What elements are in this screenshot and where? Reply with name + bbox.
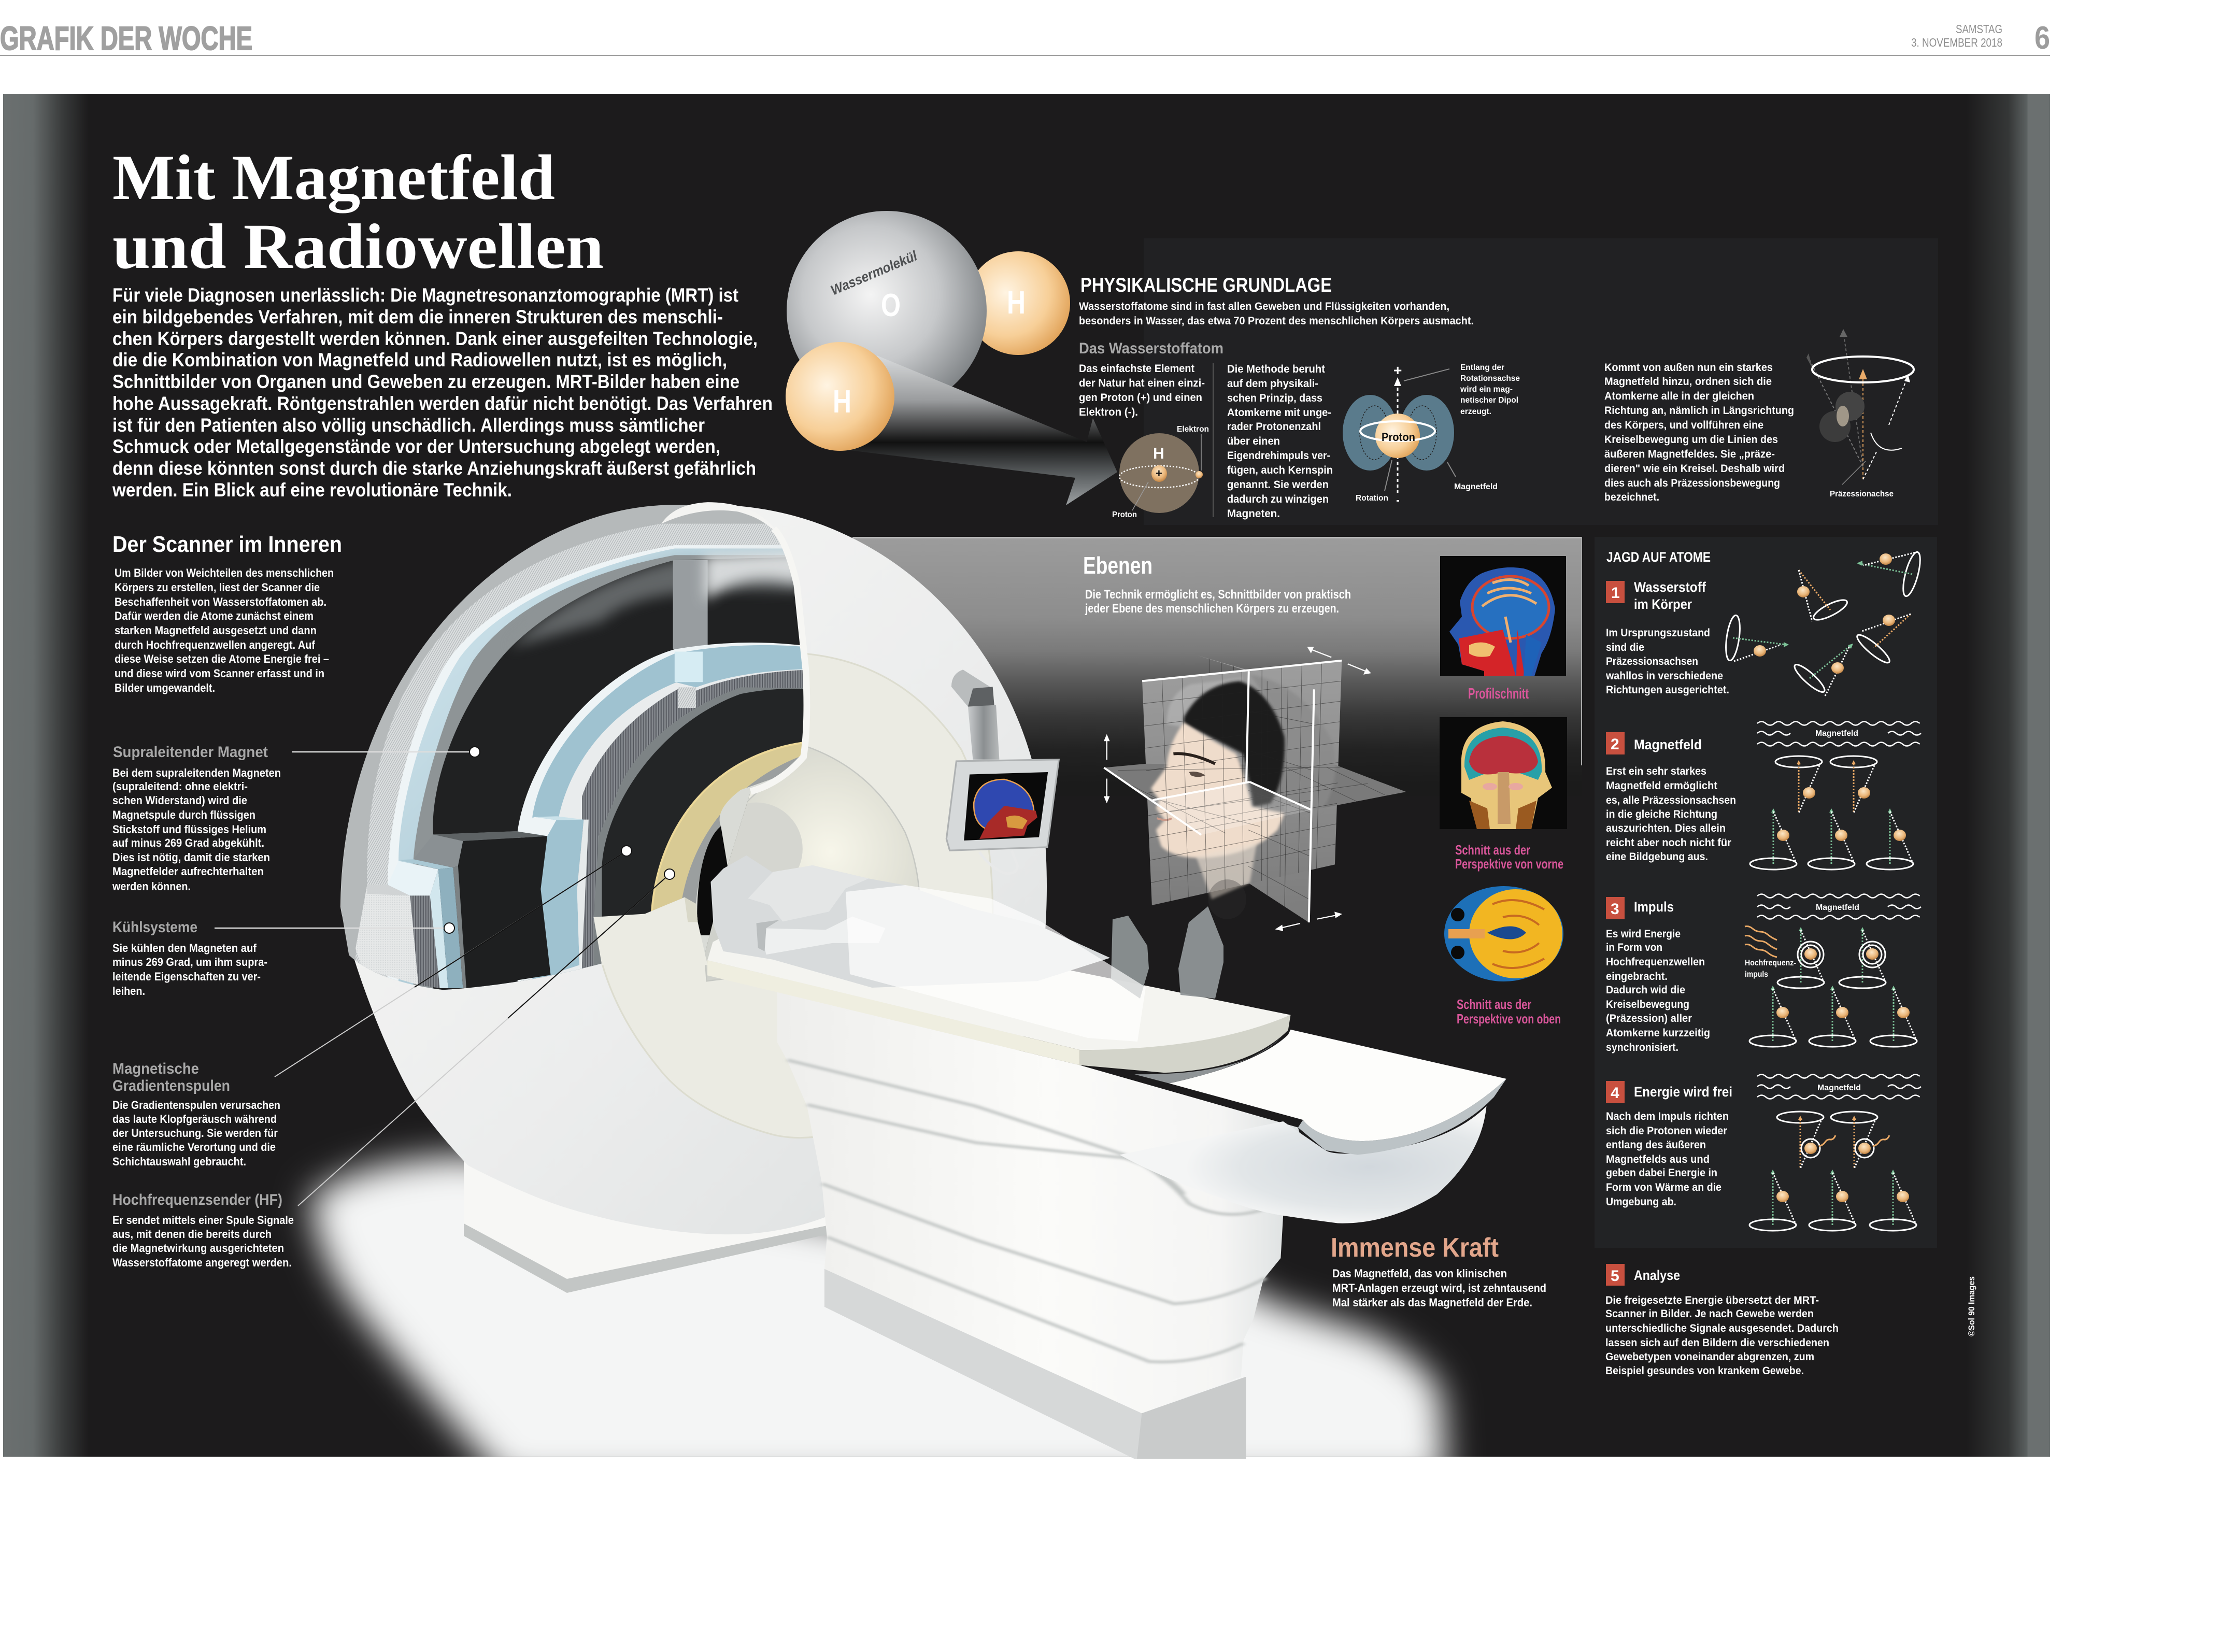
label: Supraleitender Magnet: Dies ist nötig, damit die starken bbox=[112, 851, 270, 864]
step 4: entlang des äußeren bbox=[1606, 1139, 1706, 1151]
step 1: Wasserstoff bbox=[1634, 579, 1706, 595]
column: precession text: des Körpers, und vollführen eine bbox=[1604, 419, 1763, 431]
label: Magnetische Gradientenspulen bbox=[112, 1060, 280, 1168]
column: precession text bbox=[1604, 362, 1794, 503]
step 2: reicht aber noch nicht für bbox=[1606, 837, 1731, 849]
bed slab bbox=[707, 922, 1290, 1084]
step 3: synchronisiert. bbox=[1606, 1042, 1678, 1053]
caption: Schnitt von vorne bbox=[1455, 842, 1563, 872]
column: hydrogen element: Das einfachste Element bbox=[1079, 363, 1194, 375]
step 2: Magnetfeld bbox=[1634, 737, 1702, 752]
hair bbox=[1184, 681, 1285, 807]
scanner intro text: starken Magnetfeld ausgesetzt und dann bbox=[115, 624, 317, 637]
table band shadows bbox=[787, 1060, 1266, 1362]
column: method: Magneten. bbox=[1227, 508, 1280, 520]
step 3 bbox=[1606, 897, 1710, 1053]
label: Magnetische Gradientenspulen: Schichtauswahl gebraucht. bbox=[112, 1155, 246, 1168]
horizontal plane near quadrant bbox=[1152, 782, 1312, 835]
step 4: Energie wird frei bbox=[1634, 1084, 1732, 1100]
patient body bbox=[710, 856, 1110, 988]
label: Magnetische Gradientenspulen: eine räumliche Verortung und die bbox=[112, 1141, 276, 1153]
intro text: ein bildgebendes Verfahren, mit dem die inneren Strukturen des menschli- bbox=[112, 306, 723, 327]
table body bbox=[777, 992, 1318, 1413]
step 3: (Präzession) aller bbox=[1606, 1013, 1692, 1024]
label: Kühlsysteme bbox=[112, 919, 267, 998]
icon: precession: Präzessionachse bbox=[1830, 490, 1894, 499]
step 2: 2 bbox=[1611, 736, 1619, 753]
step 5: unterschiedliche Signale ausgesendet. Dadurch bbox=[1605, 1322, 1839, 1334]
column: method: schen Prinzip, dass bbox=[1227, 392, 1322, 404]
facial details bbox=[1157, 753, 1215, 820]
magnifying cone arrow bbox=[850, 355, 1117, 505]
oxygen sphere bbox=[787, 211, 987, 411]
table bbox=[707, 922, 1506, 1459]
label: Supraleitender Magnet: Supraleitender Magnet bbox=[113, 744, 268, 761]
step 5: Analyse bbox=[1634, 1268, 1680, 1283]
icon: proton with magnetic field: + bbox=[1393, 362, 1402, 378]
step 2: auszurichten. Dies allein bbox=[1606, 822, 1726, 834]
caption: Schnitt von oben: Perspektive von oben bbox=[1457, 1011, 1561, 1027]
icon: hydrogen atom: Proton bbox=[1112, 510, 1137, 519]
intro text: Schnittbilder von Organen und Geweben zu erzeugen. MRT-Bilder haben eine bbox=[112, 371, 739, 392]
callout: Immense Kraft: Das Magnetfeld, das von klinischen bbox=[1332, 1267, 1507, 1280]
label: Supraleitender Magnet: Magnetspule durch flüssigen bbox=[112, 808, 255, 821]
column: precession text: Atomkerne alle in der gleichen bbox=[1604, 390, 1754, 402]
hair back bbox=[1250, 675, 1335, 818]
scanner intro text bbox=[115, 566, 334, 694]
right hydrogen bbox=[966, 251, 1070, 355]
scanner stand bbox=[464, 1156, 828, 1293]
column: method: Die Methode beruht bbox=[1227, 363, 1325, 375]
step 5 bbox=[1605, 1264, 1839, 1377]
scanner intro text: diese Weise setzen die Atome Energie frei – bbox=[115, 652, 329, 665]
caption: Schnitt von oben: Schnitt aus der bbox=[1457, 996, 1531, 1012]
step 5: 5 bbox=[1611, 1268, 1619, 1285]
floor glow bbox=[311, 1156, 1446, 1482]
step 1: wahllos in verschiedene bbox=[1605, 670, 1723, 682]
icon: proton with magnetic field: Proton bbox=[1382, 431, 1415, 444]
step 5: Die freigesetzte Energie übersetzt der MRT- bbox=[1605, 1294, 1819, 1306]
intro text bbox=[112, 284, 773, 501]
coronal plane bbox=[1142, 661, 1342, 905]
scanner intro text: Bilder umgewandelt. bbox=[115, 681, 215, 694]
column: precession text: Kreiselbewegung um die Linien des bbox=[1604, 434, 1778, 446]
column: precession text: Richtung an, nämlich in Längsrichtung bbox=[1604, 405, 1794, 417]
column: hydrogen element bbox=[1079, 363, 1205, 418]
step 4: Magnetfelds aus und bbox=[1606, 1153, 1710, 1165]
intro text: Schmuck oder Metallgegenstände vor der Untersuchung abgelegt werden, bbox=[112, 436, 720, 457]
column: precession text: äußeren Magnetfeldes. Sie „präze- bbox=[1604, 448, 1775, 460]
intro text: Für viele Diagnosen unerlässlich: Die Magnetresonanztomographie (MRT) ist bbox=[112, 284, 738, 306]
image: sagittal brain scan bbox=[1440, 556, 1566, 676]
label: Hochfrequenzsender: aus, mit denen die bereits durch bbox=[112, 1228, 272, 1241]
step 5: Gewebetypen voneinander abgrenzen, zum bbox=[1605, 1351, 1814, 1363]
column: precession text: Magnetfeld hinzu, ordnen sich die bbox=[1604, 376, 1772, 388]
label: Hochfrequenzsender: Hochfrequenzsender (HF) bbox=[112, 1191, 282, 1208]
intro text: werden. Ein Blick auf eine revolutionäre Technik. bbox=[112, 479, 512, 501]
date bbox=[1911, 22, 2002, 49]
icon: proton with magnetic field: Magnetfeld bbox=[1454, 482, 1498, 491]
scanner intro text: Dafür werden die Atome zunächst einem bbox=[115, 609, 314, 622]
physikalische Grundlage text: Das Wasserstoffatom bbox=[1079, 340, 1223, 357]
Ebenen heading and text: Ebenen bbox=[1083, 552, 1152, 579]
step 4 bbox=[1606, 1081, 1732, 1208]
step 5: Beispiel gesundes von krankem Gewebe. bbox=[1605, 1365, 1804, 1377]
column: method: genannt. Sie werden bbox=[1227, 479, 1329, 491]
diagram: random precession axes bbox=[1724, 550, 1924, 696]
leader lines and dots bbox=[215, 747, 675, 1206]
step 5: lassen sich auf den Bildern die verschiedenen bbox=[1605, 1337, 1829, 1349]
diagram: impulse: impuls bbox=[1745, 970, 1768, 979]
column: method: dadurch zu winzigen bbox=[1227, 493, 1329, 505]
tray front bbox=[1119, 1106, 1487, 1223]
tray top bbox=[1169, 1030, 1506, 1141]
tray rim bbox=[1298, 1079, 1506, 1155]
icon: proton with magnetic field: netischer Dipol bbox=[1460, 396, 1518, 405]
left hydrogen bbox=[786, 342, 894, 451]
diagram: aligned axes bbox=[1750, 721, 1921, 870]
column: method: rader Protonenzahl bbox=[1227, 421, 1321, 433]
column: precession text: dies auch als Präzessionsbewegung bbox=[1604, 477, 1780, 489]
diagram: energy release: Magnetfeld bbox=[1817, 1084, 1861, 1092]
caption: Schnitt von vorne: Schnitt aus der bbox=[1455, 842, 1530, 858]
column: method: fügen, auch Kernspin bbox=[1227, 464, 1333, 476]
intro text: ist für den Patienten also völlig unschädlich. Allerdings muss sämtlicher bbox=[112, 415, 705, 436]
cutaway section bbox=[331, 499, 820, 1002]
step 3: 3 bbox=[1611, 901, 1619, 918]
scanner intro text: Um Bilder von Weichteilen des menschlichen bbox=[115, 566, 334, 579]
icon: proton with magnetic field: erzeugt. bbox=[1460, 407, 1491, 416]
label: Kühlsysteme: leitende Eigenschaften zu ver- bbox=[112, 970, 261, 983]
step 2: eine Bildgebung aus. bbox=[1606, 851, 1708, 863]
callout: Immense Kraft bbox=[1331, 1233, 1546, 1309]
step 4: Nach dem Impuls richten bbox=[1606, 1110, 1729, 1122]
callout: Immense Kraft: Mal stärker als das Magnetfeld der Erde. bbox=[1332, 1296, 1532, 1309]
Jagd auf Atome heading: JAGD AUF ATOME bbox=[1606, 549, 1711, 565]
page header bbox=[0, 20, 2050, 57]
column: precession text: bezeichnet. bbox=[1604, 491, 1659, 503]
step 3: in Form von bbox=[1606, 942, 1662, 953]
shell right edge bbox=[751, 529, 807, 791]
intro text: die die Kombination von Magnetfeld und Radiowellen nutzt, ist es möglich, bbox=[112, 349, 727, 371]
label: Supraleitender Magnet: werden können. bbox=[112, 880, 191, 893]
caption: Profilschnitt: Profilschnitt bbox=[1468, 686, 1529, 702]
diagram: aligned axes: Magnetfeld bbox=[1815, 729, 1858, 738]
step 2: es, alle Präzessionsachsen bbox=[1606, 794, 1736, 806]
label: Supraleitender Magnet bbox=[112, 744, 281, 893]
step 3: Kreiselbewegung bbox=[1606, 999, 1689, 1010]
section title: GRAFIK DER WOCHE bbox=[0, 20, 252, 57]
column: method: über einen bbox=[1227, 435, 1280, 447]
monitor arm bbox=[951, 670, 999, 760]
image: axial brain scan bbox=[1444, 886, 1563, 981]
step 3: Hochfrequenzwellen bbox=[1606, 956, 1705, 968]
Ebenen heading and text: jeder Ebene des menschlichen Körpers zu erzeugen. bbox=[1085, 602, 1339, 616]
step 2: Magnetfeld ermöglicht bbox=[1606, 780, 1717, 792]
horizontal plane bbox=[1104, 764, 1406, 835]
shell top crescent bbox=[661, 502, 787, 548]
Ebenen heading and text: Die Technik ermöglicht es, Schnittbilder von praktisch bbox=[1085, 588, 1351, 602]
label: Hochfrequenzsender: die Magnetwirkung ausgerichteten bbox=[112, 1242, 284, 1255]
column: method: Atomkerne mit unge- bbox=[1227, 407, 1331, 419]
label: Kühlsysteme: Sie kühlen den Magneten auf bbox=[112, 942, 257, 955]
plane arrows bbox=[1105, 647, 1370, 930]
step 1: im Körper bbox=[1634, 596, 1692, 612]
bright plane edges bbox=[1104, 661, 1342, 922]
label: Magnetische Gradientenspulen: das laute Klopfgeräusch während bbox=[112, 1113, 277, 1126]
physikalische Grundlage text bbox=[1079, 274, 1474, 357]
column: method: auf dem physikali- bbox=[1227, 378, 1318, 390]
image: coronal brain scan bbox=[1440, 717, 1567, 829]
atom letters bbox=[833, 285, 1026, 420]
step 1: Richtungen ausgerichtet. bbox=[1606, 684, 1729, 696]
panel: physikalische Grundlage background bbox=[1144, 238, 1938, 525]
scanner intro text: Körpers zu erstellen, liest der Scanner die bbox=[115, 581, 320, 594]
label: Supraleitender Magnet: (supraleitend: ohne elektri- bbox=[112, 780, 248, 793]
date: 3. NOVEMBER 2018 bbox=[1911, 36, 2002, 49]
column: method bbox=[1227, 363, 1333, 520]
physikalische Grundlage text: PHYSIKALISCHE GRUNDLAGE bbox=[1080, 274, 1332, 296]
page number: 6 bbox=[2034, 20, 2050, 56]
column: method: Eigendrehimpuls ver- bbox=[1227, 450, 1330, 462]
step 1 bbox=[1605, 579, 1729, 696]
icon: proton with magnetic field: Rotationsachse bbox=[1460, 374, 1520, 383]
intro text: hohe Aussagekraft. Röntgenstrahlen werden dafür nicht benötigt. Das Verfahren bbox=[112, 393, 773, 414]
panel: Ebenen background bbox=[852, 537, 1582, 796]
illustration: head with cutting planes bbox=[1104, 647, 1406, 930]
icon: hydrogen atom bbox=[1112, 425, 1209, 519]
step 4: geben dabei Energie in bbox=[1606, 1167, 1717, 1179]
icon: proton with magnetic field: wird ein mag- bbox=[1460, 385, 1513, 394]
callout: Immense Kraft: MRT-Anlagen erzeugt wird, ist zehntausend bbox=[1332, 1281, 1546, 1294]
step 4: 4 bbox=[1611, 1085, 1619, 1102]
scanner intro text: Beschaffenheit von Wasserstoffatomen ab. bbox=[115, 595, 326, 608]
step 3: Impuls bbox=[1634, 899, 1674, 915]
label: Hochfrequenzsender bbox=[112, 1191, 294, 1269]
scanner intro text: und diese wird vom Scanner erfasst und in bbox=[115, 667, 324, 680]
monitor and arm bbox=[946, 670, 1059, 874]
step 2: in die gleiche Richtung bbox=[1606, 808, 1717, 820]
caption: Schnitt von oben bbox=[1457, 996, 1561, 1027]
date: SAMSTAG bbox=[1956, 22, 2002, 36]
icon: proton with magnetic field bbox=[1343, 362, 1520, 503]
title bbox=[112, 142, 604, 282]
step 3: Dadurch wid die bbox=[1606, 984, 1685, 996]
column: hydrogen element: Elektron (-). bbox=[1079, 406, 1138, 418]
step 5: Scanner in Bilder. Je nach Gewebe werden bbox=[1605, 1308, 1814, 1320]
bore lip bbox=[593, 898, 708, 965]
step 3: eingebracht. bbox=[1606, 971, 1668, 982]
water molecule illustration bbox=[786, 211, 1117, 505]
step 4: Umgebung ab. bbox=[1606, 1196, 1676, 1208]
callout: Immense Kraft: Immense Kraft bbox=[1331, 1233, 1499, 1263]
column: hydrogen element: der Natur hat einen einzi- bbox=[1079, 377, 1205, 389]
molecule label: Wassermolekül bbox=[829, 248, 920, 298]
table base bbox=[824, 1269, 1246, 1459]
label: Hochfrequenzsender: Wasserstoffatome angeregt werden. bbox=[112, 1256, 292, 1269]
diagram: impulse: Hochfrequenz- bbox=[1745, 959, 1796, 967]
step 3: Atomkerne kurzzeitig bbox=[1606, 1027, 1710, 1039]
patient feet bbox=[1111, 906, 1223, 999]
title: Mit Magnetfeld bbox=[112, 142, 555, 213]
Ebenen heading and text bbox=[1083, 552, 1351, 616]
column: hydrogen element: gen Proton (+) und einen bbox=[1079, 392, 1202, 404]
label: Supraleitender Magnet: auf minus 269 Grad abgekühlt. bbox=[112, 836, 264, 849]
step 1: Im Ursprungszustand bbox=[1606, 627, 1710, 639]
step 1: Präzessionsachsen bbox=[1606, 656, 1698, 667]
scanner heading: Der Scanner im Inneren bbox=[112, 532, 342, 557]
step 1: sind die bbox=[1606, 642, 1644, 653]
icon: precession bbox=[1806, 329, 1914, 499]
label: Kühlsysteme: minus 269 Grad, um ihm supra- bbox=[112, 956, 267, 969]
label: Kühlsysteme: Kühlsysteme bbox=[112, 919, 197, 936]
bore opening bbox=[593, 654, 993, 1138]
icon: hydrogen atom: H bbox=[1153, 445, 1164, 462]
gantry outer shell bbox=[340, 505, 1047, 1234]
icon: proton with magnetic field: Rotation bbox=[1356, 494, 1388, 503]
label: Supraleitender Magnet: Stickstoff und flüssiges Helium bbox=[112, 823, 266, 836]
neck bbox=[1196, 843, 1257, 899]
intro text: denn diese könnten sonst durch die starke Anziehungskraft äußerst gefährlich bbox=[112, 458, 756, 479]
label: Magnetische Gradientenspulen: Die Gradientenspulen verursachen bbox=[112, 1099, 280, 1112]
label: Magnetische Gradientenspulen: Gradientenspulen bbox=[112, 1077, 230, 1094]
title: und Radiowellen bbox=[112, 211, 604, 282]
step 4: Form von Wärme an die bbox=[1606, 1181, 1721, 1193]
label: Magnetische Gradientenspulen: Magnetische bbox=[112, 1060, 199, 1077]
sagittal plane bbox=[1197, 656, 1314, 922]
diagram: impulse: Magnetfeld bbox=[1816, 903, 1859, 912]
main dark panel bbox=[3, 94, 2050, 1457]
label: Hochfrequenzsender: Er sendet mittels einer Spule Signale bbox=[112, 1214, 294, 1227]
patient sheet bbox=[846, 885, 1146, 1042]
atom letters: H bbox=[1007, 285, 1026, 321]
step 4: sich die Protonen wieder bbox=[1606, 1125, 1727, 1137]
translucent hair front bbox=[1166, 678, 1243, 728]
diagram: energy release bbox=[1749, 1075, 1921, 1231]
step 3: Es wird Energie bbox=[1606, 928, 1681, 940]
label: Supraleitender Magnet: schen Widerstand) wird die bbox=[112, 794, 247, 807]
label: Supraleitender Magnet: Magnetfelder aufrechterhalten bbox=[112, 865, 264, 878]
monitor bbox=[946, 760, 1059, 874]
panel: Jagd auf Atome background bbox=[1595, 537, 1937, 1248]
credit: ©Sol 90 Images bbox=[1967, 1276, 1976, 1336]
step 1: 1 bbox=[1611, 585, 1620, 602]
scanner intro text: durch Hochfrequenzwellen angeregt. Auf bbox=[115, 638, 316, 651]
icon: proton with magnetic field: Entlang der bbox=[1460, 363, 1504, 372]
step 2 bbox=[1606, 732, 1736, 863]
intro text: chen Körpers dargestellt werden können. Dank einer ausgefeilten Technologie, bbox=[112, 328, 758, 349]
caption: Schnitt von vorne: Perspektive von vorne bbox=[1455, 856, 1563, 872]
column: precession text: dieren" wie ein Kreisel. Deshalb wird bbox=[1604, 463, 1785, 475]
label: Supraleitender Magnet: Bei dem supraleitenden Magneten bbox=[112, 766, 281, 779]
icon: hydrogen atom: Elektron bbox=[1177, 425, 1209, 434]
physikalische Grundlage text: Wasserstoffatome sind in fast allen Geweben und Flüssigkeiten vorhanden, bbox=[1079, 301, 1449, 312]
label: Magnetische Gradientenspulen: der Untersuchung. Sie werden für bbox=[112, 1127, 278, 1140]
label: Kühlsysteme: leihen. bbox=[112, 985, 145, 998]
atom letters: H bbox=[833, 384, 851, 420]
illustration: MRI scanner bbox=[215, 499, 1506, 1459]
grid lines bbox=[1143, 663, 1341, 901]
physikalische Grundlage text: besonders in Wasser, das etwa 70 Prozent des menschlichen Körpers ausmacht. bbox=[1079, 315, 1474, 327]
diagram: impulse bbox=[1745, 894, 1921, 1047]
step 2: Erst ein sehr starkes bbox=[1606, 765, 1706, 777]
atom letters: O bbox=[881, 288, 901, 323]
column: precession text: Kommt von außen nun ein starkes bbox=[1604, 362, 1773, 374]
icon: hydrogen atom: + bbox=[1156, 467, 1162, 480]
face bbox=[1151, 722, 1285, 858]
